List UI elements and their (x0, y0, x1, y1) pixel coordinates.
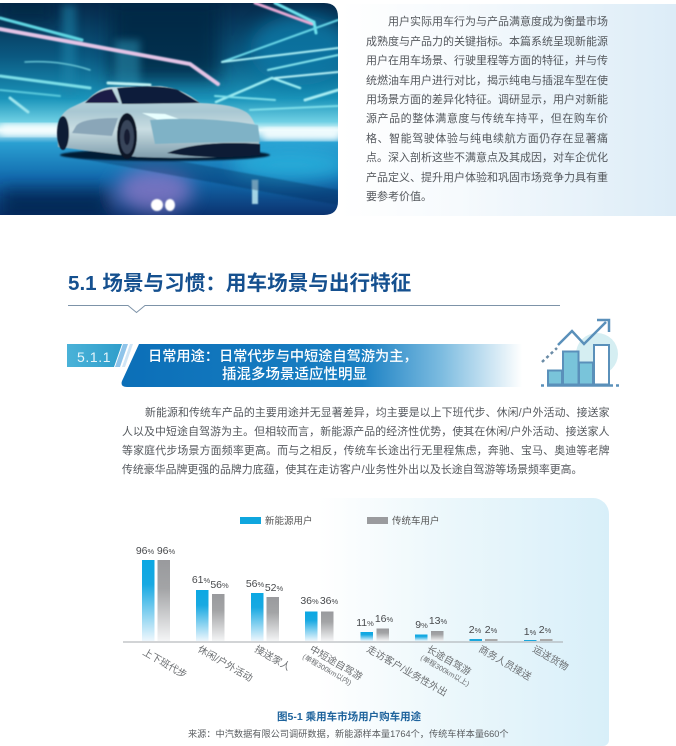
value labels: 11% (356, 617, 374, 629)
value labels: 1% (524, 626, 537, 638)
body paragraph (122, 406, 610, 476)
value labels: 56% (246, 578, 265, 590)
intro text panel: 要参考价值。 (366, 190, 432, 202)
intro text panel: 用场景方面的差异化特征。调研显示，用户对新能 (366, 94, 608, 106)
category labels: 休闲/户外活动 (196, 642, 255, 684)
value labels: 9% (415, 619, 428, 631)
intro text panel: 用户实际用车行为与产品满意度成为衡量市场 (388, 16, 608, 28)
intro text panel: 点。深入剖析这些不满意点及其成因，对车企优化 (366, 152, 608, 164)
body paragraph: 等家庭代步场景方面频率更高。而与之相反，传统车长途出行无里程焦虑，奔驰、宝马、奥迪等老牌 (122, 445, 610, 457)
value labels: 52% (265, 582, 284, 594)
figure caption: 图5-1 乘用车市场用户购车用途 (277, 711, 421, 723)
intro text panel: 成熟度与产品力的关键指标。本篇系统呈现新能源 (366, 36, 608, 48)
bar chart: car use by user type (123, 515, 571, 699)
car (57, 86, 270, 161)
road reflections (79, 158, 338, 212)
intro text panel: 统燃油车用户进行对比，揭示纯电与插混车型在使 (366, 74, 608, 86)
bars (142, 560, 552, 641)
category labels: (单程300km以内) (301, 652, 353, 687)
value labels: 16% (375, 613, 394, 625)
value labels: 36% (320, 595, 339, 607)
banner heading line 2: 插混多场景适应性明显 (222, 367, 367, 383)
value labels (136, 545, 552, 638)
panel: chart background (50, 498, 608, 746)
icon: rising bar chart (541, 318, 619, 387)
category labels (140, 642, 571, 699)
legend: traditional car users: 传统车用户 (392, 515, 440, 527)
intro text panel: 用户在用车场景、行驶里程等方面的特征，并与传 (366, 54, 608, 66)
category labels: 商务人员接送 (476, 642, 534, 683)
axis (123, 641, 563, 643)
body paragraph: 新能源和传统车产品的主要用途并无显著差异，均主要是以上下班代步、休闲/户外活动、接送家 (145, 407, 610, 419)
legend: new energy users: 新能源用户 (265, 515, 313, 527)
subsection banner (67, 344, 517, 387)
intro text panel: 源产品的整体满意度与传统车持平，但在购车价 (366, 112, 608, 124)
value labels: 13% (429, 615, 448, 627)
body paragraph: 传统豪华品牌更强的品牌力底蕴，使其在走访客户/业务性外出以及长途自驾游等场景频率更高。 (122, 464, 582, 476)
category labels: 运送货物 (530, 642, 571, 673)
category labels: 长途自驾游 (424, 642, 474, 678)
category labels: 接送家人 (252, 642, 293, 673)
category labels: 上下班代步 (140, 646, 189, 681)
banner heading line 1: 日常用途：日常代步与中短途自驾游为主， (148, 348, 418, 364)
value labels: 96% (157, 545, 176, 557)
legend: traditional car users (367, 515, 440, 527)
source note: 来源：中汽数据有限公司调研数据，新能源样本量1764个，传统车样本量660个 (188, 729, 509, 739)
value labels: 2% (485, 624, 498, 636)
intro text panel (340, 4, 676, 216)
value labels: 2% (539, 624, 552, 636)
category labels: 走访客户/业务性外出 (364, 642, 450, 699)
value labels: 56% (210, 579, 229, 591)
category labels: (单程300km以上) (419, 653, 471, 688)
value labels: 36% (300, 595, 319, 607)
category labels: 中短途自驾游 (308, 642, 365, 683)
hero image: silver electric car with neon light trails (0, 3, 338, 215)
intro text panel: 格、智能驾驶体验与纯电续航方面仍存在显著痛 (366, 132, 608, 144)
value labels: 61% (192, 574, 211, 586)
intro text panel: 产品定义、提升用户体验和巩固市场竞争力具有重 (366, 172, 608, 184)
section heading: 5.1 场景与习惯：用车场景与出行特征 (68, 272, 411, 295)
banner shape (67, 344, 517, 387)
value labels: 2% (469, 624, 482, 636)
body paragraph: 人以及中短途自驾游为主。但相较而言，新能源产品的经济性优势，使其在休闲/户外活动、接送家人 (122, 426, 610, 438)
section number: 5.1.1 (77, 349, 111, 365)
heading rule with notch (68, 305, 560, 313)
legend: new energy users (240, 515, 313, 527)
value labels: 96% (136, 545, 155, 557)
